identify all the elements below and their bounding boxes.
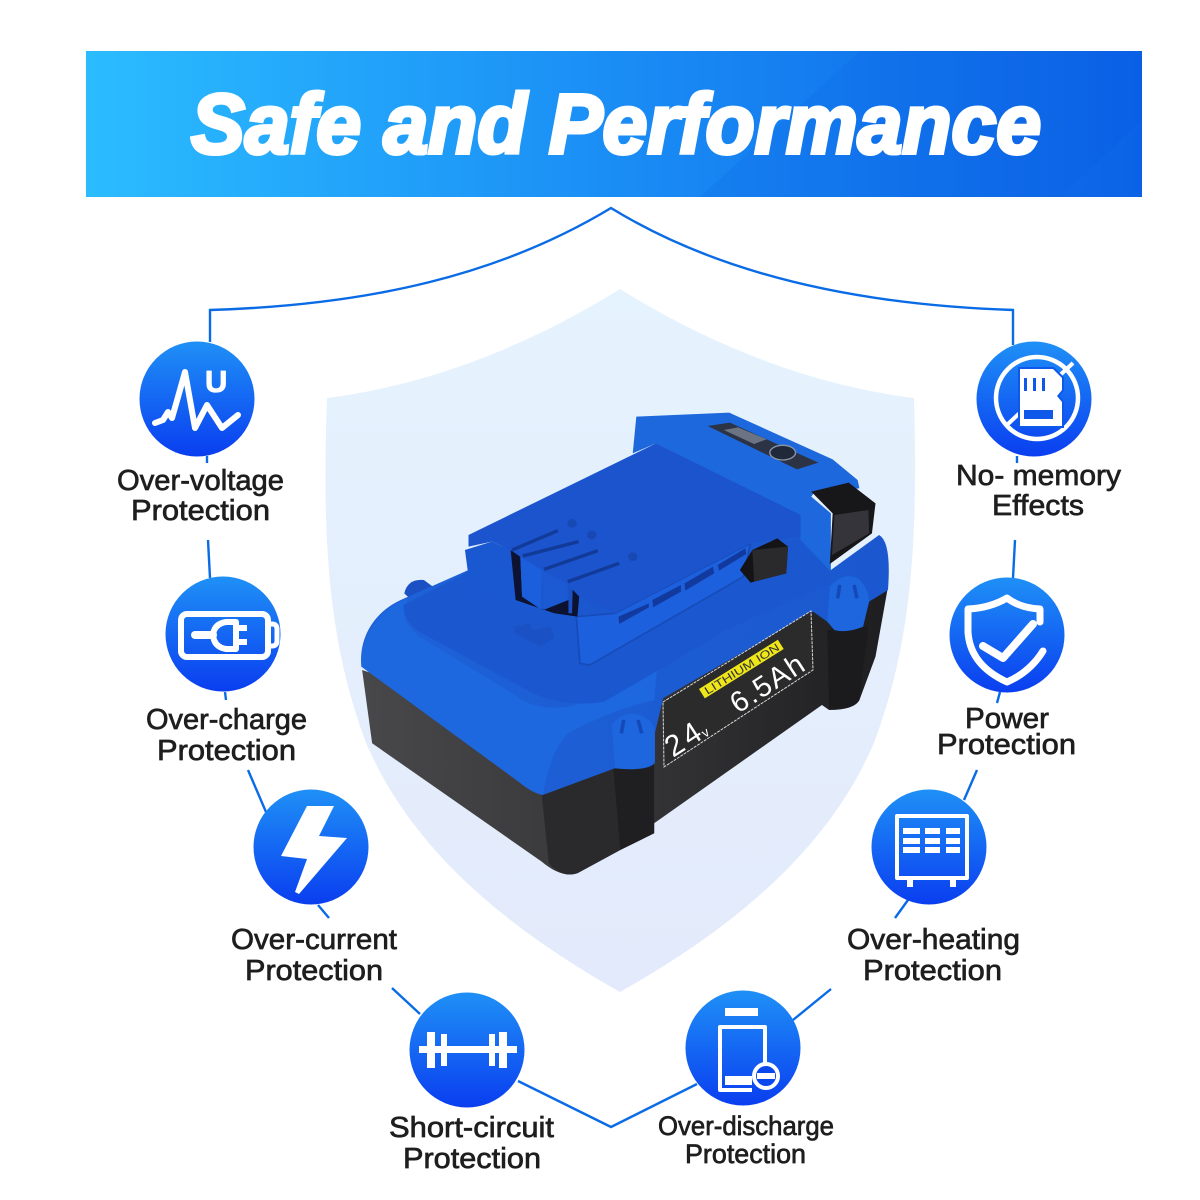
slider button	[740, 538, 788, 583]
yellow tag	[699, 640, 784, 700]
icon: lightning bolt	[281, 806, 347, 894]
battery photo illustration	[361, 413, 889, 875]
label: Protection	[403, 1143, 541, 1175]
battery label plate	[659, 611, 813, 767]
label: Over-voltage	[117, 465, 284, 497]
title: Safe and Performance	[191, 77, 1041, 171]
feature: over-voltage: U	[205, 364, 227, 399]
label: Effects	[992, 490, 1084, 522]
connector blocks	[465, 542, 516, 600]
lid front highlight	[361, 598, 658, 795]
icon: voltage wave	[155, 372, 238, 428]
feature: no memory	[956, 342, 1122, 522]
battery label plate: v	[698, 724, 713, 741]
battery black lower body	[362, 587, 888, 874]
feature: over-discharge	[658, 990, 834, 1169]
icon: short circuit bars	[419, 1032, 517, 1068]
label: Over-heating	[847, 924, 1020, 956]
icon: crossed memory card	[996, 357, 1078, 439]
contact slots	[512, 531, 619, 582]
feature: over-charge	[146, 576, 307, 767]
label: Power	[965, 703, 1049, 735]
display strip	[708, 423, 818, 469]
label: Protection	[157, 735, 296, 767]
yellow tag: LITHIUM ION	[703, 642, 782, 697]
label: Over-charge	[146, 704, 307, 736]
feature: short-circuit	[389, 992, 554, 1175]
battery nub	[404, 580, 433, 600]
lid raised plateau	[403, 540, 831, 704]
rail vents	[618, 548, 746, 624]
connector lines outline	[207, 208, 1017, 1127]
24V: 24	[659, 716, 708, 764]
label: No- memory	[956, 460, 1122, 492]
icon: heat grid	[897, 816, 967, 887]
icon: battery plug	[181, 614, 277, 657]
contact marks	[572, 523, 633, 557]
icon: shield check	[968, 598, 1043, 682]
feature: over-heating	[847, 790, 1020, 987]
corner bump tabs	[612, 714, 655, 769]
background shield	[325, 289, 915, 992]
feature: power	[937, 578, 1076, 761]
label: Over-current	[231, 924, 397, 956]
6.5Ah: 6.5Ah	[724, 648, 811, 720]
top slide plate	[469, 443, 801, 613]
rail side face with vents	[576, 543, 751, 665]
battery blue lid	[361, 443, 889, 795]
header banner	[86, 51, 1142, 197]
feature: over-voltage	[117, 342, 284, 527]
label: Protection	[863, 955, 1002, 987]
label: Short-circuit	[389, 1112, 554, 1144]
label: Protection	[245, 955, 383, 987]
label: Protection	[937, 729, 1076, 761]
rear housing	[633, 413, 859, 572]
icon: low battery	[720, 1008, 778, 1090]
teeth	[513, 623, 554, 647]
label: Over-discharge	[658, 1111, 834, 1141]
label: Protection	[685, 1139, 806, 1169]
side latch	[811, 483, 876, 564]
feature: over-current	[231, 790, 397, 987]
label: Protection	[131, 495, 270, 527]
